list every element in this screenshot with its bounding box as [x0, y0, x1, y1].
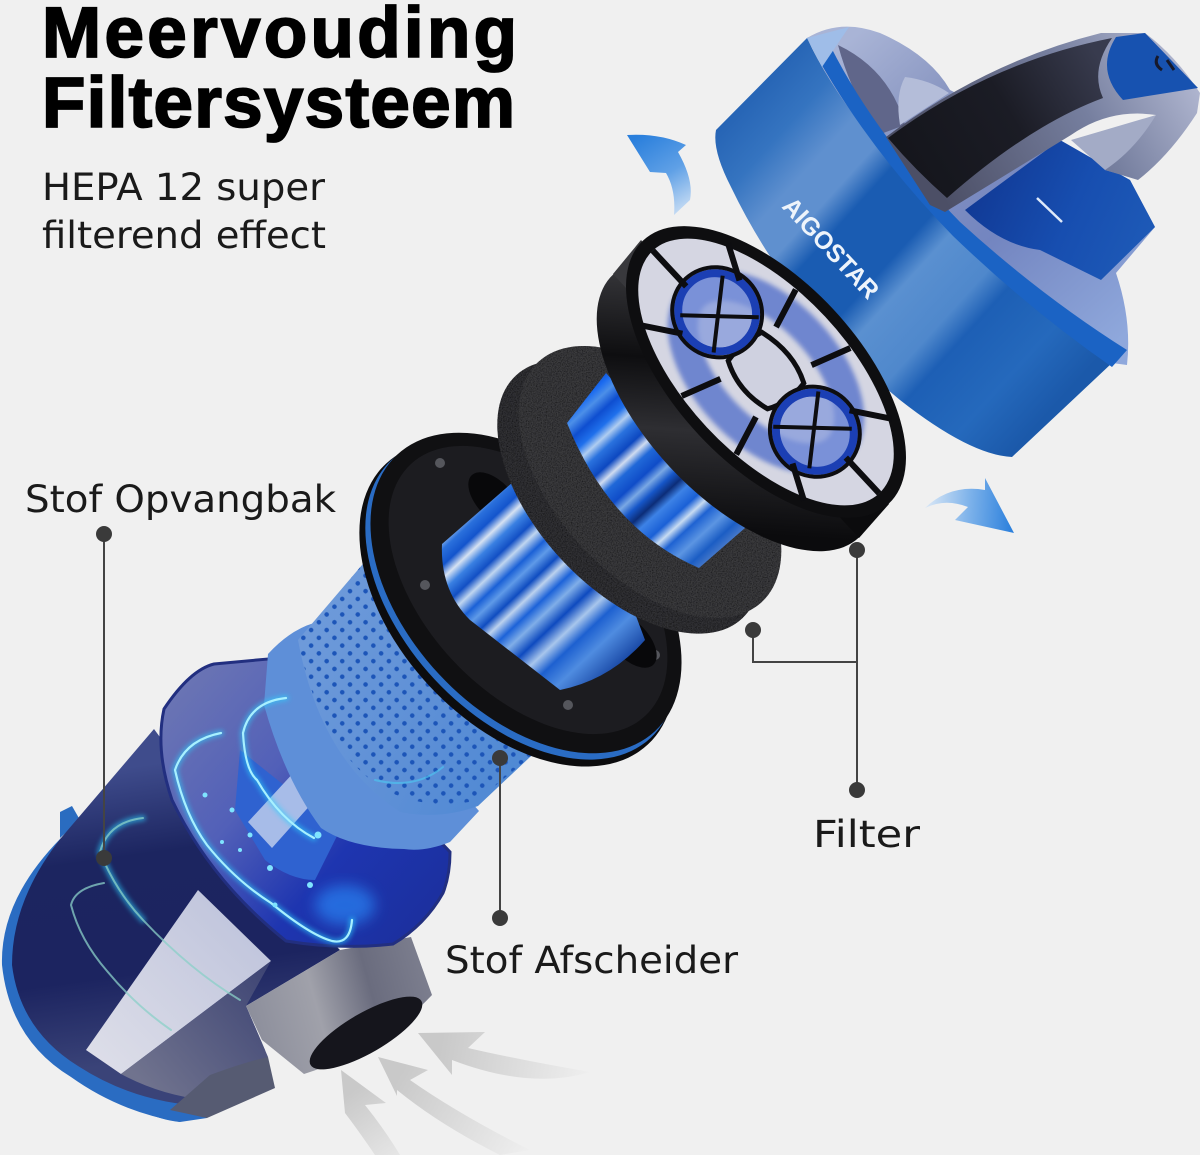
handle grey frame [886, 33, 1200, 212]
subtitle: HEPA 12 super [42, 166, 326, 209]
dust bin lower body [2, 729, 340, 1122]
icon: blue exhaust arrow right [925, 478, 1014, 533]
dust separator collar [264, 623, 479, 850]
lid hook and handle [886, 33, 1200, 280]
filter shell [547, 213, 925, 599]
motion streaks through foam [567, 373, 745, 568]
filter face [576, 178, 956, 566]
callout: Filter [745, 542, 921, 856]
motion streaks through cup [442, 482, 645, 690]
icon: grey airflow intake arrows [341, 1032, 590, 1155]
callout: Stof Afscheider: Stof Afscheider [445, 939, 739, 982]
callout: Stof Afscheider [445, 750, 739, 982]
callout: Stof Opvangbak [25, 478, 337, 866]
cup ring [298, 374, 742, 826]
inner cyclone cone [235, 750, 340, 880]
dust particle specks [202, 792, 322, 908]
blue glow in bowl [315, 885, 375, 925]
HEPA filter [547, 178, 956, 599]
brand wordmark: AIGOSTAR [777, 192, 884, 305]
handle opening [1071, 115, 1156, 177]
title: Filtersysteem [42, 64, 515, 143]
callout: Stof Opvangbak: Stof Opvangbak [25, 478, 337, 521]
central lens [721, 327, 811, 417]
title [42, 0, 517, 143]
inlet tube [246, 937, 432, 1082]
icon: blue exhaust arrow up-left [627, 135, 691, 215]
subtitle [42, 166, 326, 257]
blue lid body [715, 27, 1155, 457]
foam filter [449, 298, 831, 681]
release button [1107, 33, 1198, 100]
callout: Filter: Filter [813, 813, 921, 856]
blue hook [965, 140, 1155, 280]
dust bin upper bowl [161, 659, 450, 946]
neon air swirls [71, 698, 443, 1030]
handle dark wedge [888, 38, 1112, 198]
dust separator mesh cone [298, 558, 600, 815]
subtitle: filterend effect [42, 214, 326, 257]
